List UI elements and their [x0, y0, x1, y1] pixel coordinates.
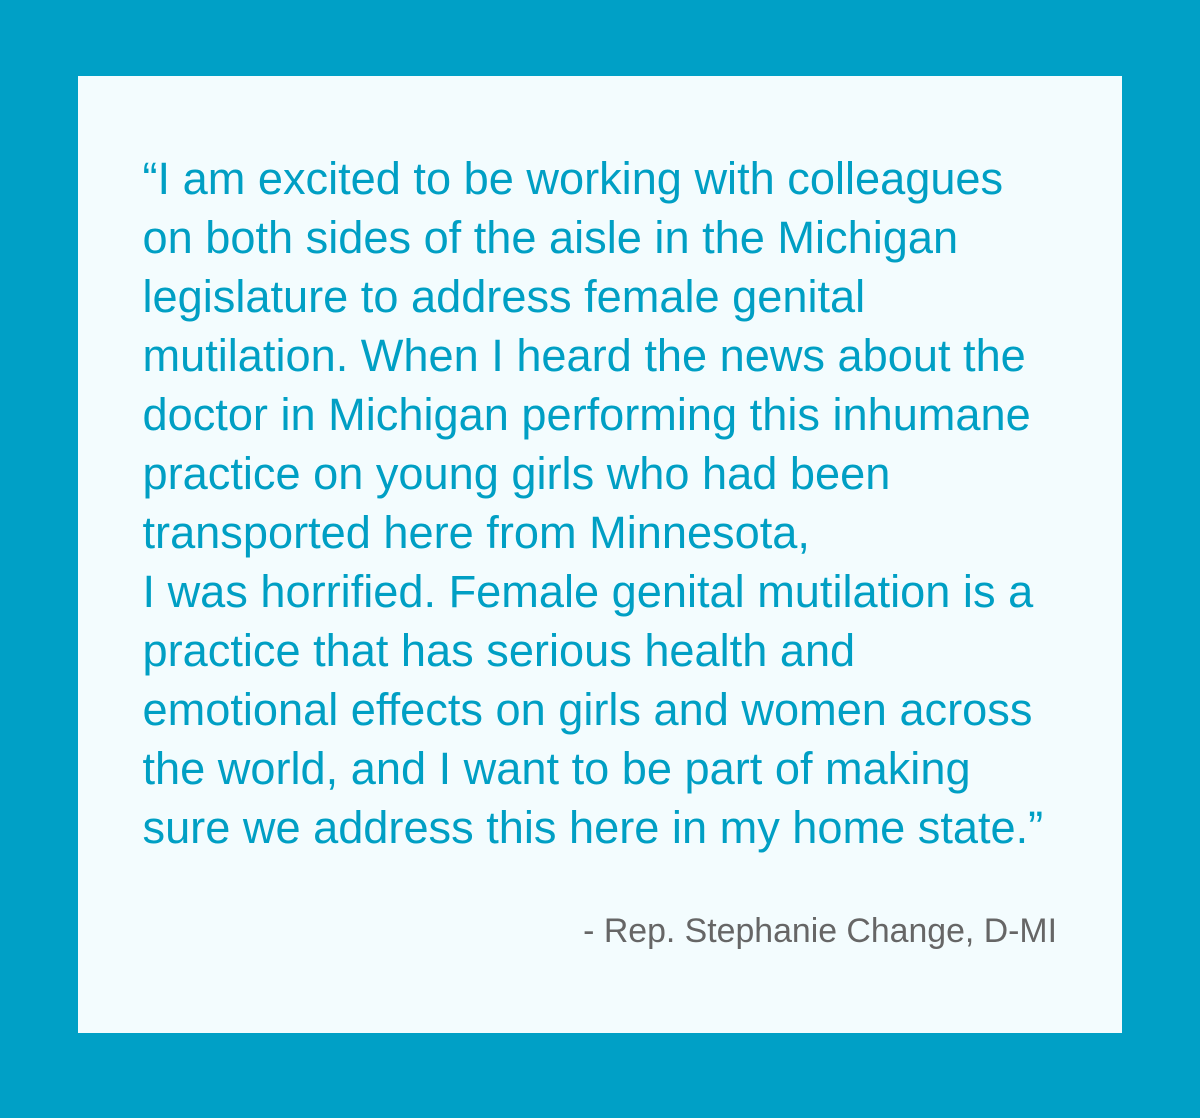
quote text: emotional effects on girls and women across [142, 684, 1032, 735]
quote text: the world, and I want to be part of making [142, 743, 971, 794]
quote text [142, 153, 1043, 853]
quote text: transported here from Minnesota, [142, 507, 810, 558]
quote text: practice that has serious health and [142, 625, 855, 676]
panel: quote card [78, 76, 1122, 1032]
quote text: I was horrified. Female genital mutilation is a [142, 566, 1033, 617]
quote text: mutilation. When I heard the news about the [142, 330, 1026, 381]
quote text: on both sides of the aisle in the Michigan [142, 212, 958, 263]
quote text: practice on young girls who had been [142, 448, 890, 499]
quote text: doctor in Michigan performing this inhumane [142, 389, 1031, 440]
attribution: - Rep. Stephanie Change, D-MI [583, 912, 1057, 950]
quote text: legislature to address female genital [142, 271, 865, 322]
quote text: “I am excited to be working with colleagues [142, 153, 1003, 204]
quote text: sure we address this here in my home state.” [142, 802, 1043, 853]
